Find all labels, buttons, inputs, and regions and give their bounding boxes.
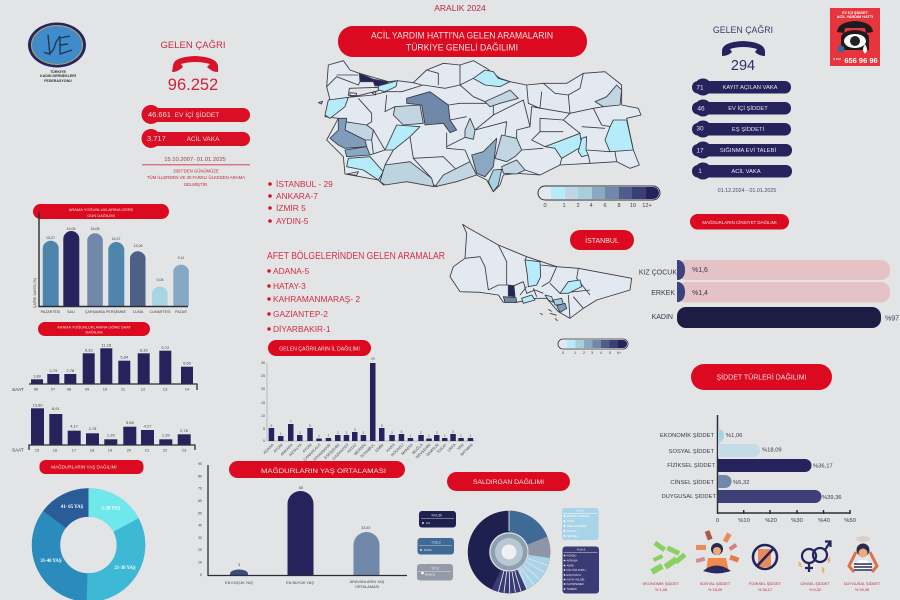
- bar chart: calls per city: 5: [263, 427, 265, 431]
- city chart pill: GELEN ÇAĞRILARIN İL DAĞILIMI: [279, 346, 360, 352]
- bar chart: hours 15-23: 21: [145, 448, 150, 452]
- violence icon captions: % 39,36: [855, 587, 869, 592]
- istanbul legend: 3: [591, 351, 593, 355]
- bar chart: calls per city: 1: [470, 434, 472, 438]
- pill: acil vaka: [142, 129, 250, 148]
- legend box: relatives: DAMAT: [567, 529, 577, 533]
- bar chart: average age: 0: [200, 573, 202, 577]
- bar chart: hours 15-23: 20: [127, 448, 132, 452]
- choropleth map of Istanbul: [450, 224, 632, 321]
- violence icon captions: CİNSEL ŞİDDET: [800, 581, 830, 586]
- donut chart: age groups: 5-20 YAŞ: [102, 506, 121, 512]
- bar chart: calls per weekday: PAZAR: [175, 310, 187, 314]
- date range and note: GELMİŞTİR.: [184, 182, 208, 187]
- age distribution pill: [40, 460, 144, 474]
- bar chart: hours 15-23: 18: [90, 448, 95, 452]
- bar chart: violence types: EKONOMİK ŞİDDET: [660, 432, 714, 439]
- map legend: [538, 186, 660, 209]
- bar chart: hours 06-14: 2,78: [66, 368, 75, 373]
- bar chart: hours 06-14: 9,72: [161, 345, 170, 350]
- legend box: others: KAYIN VALİDE: [566, 576, 585, 582]
- bar chart: average age: 80: [198, 474, 202, 478]
- violence types pill: [691, 364, 832, 390]
- bar chart: average age: [198, 462, 407, 589]
- bar chart: hours 06-14: 09: [85, 386, 90, 392]
- map legend: 8: [617, 203, 621, 209]
- bar chart: calls per city: VAN: [457, 443, 465, 451]
- bar chart: hours 06-14: 08: [67, 386, 72, 392]
- gender bars: %1,4: [692, 290, 708, 297]
- bar chart: average age: 40: [198, 524, 202, 528]
- list: disaster region cities: HATAY-3: [273, 281, 306, 291]
- pill list: case statistics: 71: [696, 84, 704, 92]
- bar chart: hours 15-23: 19: [108, 448, 113, 452]
- icon: navy telephone: [722, 41, 765, 56]
- call count number: 294: [731, 58, 755, 74]
- pill: acil vaka: 3.717: [147, 134, 166, 143]
- date range right: 01.12.2024 - 01.01.2025: [718, 188, 776, 194]
- bar chart: average age: EN KÜÇÜK YAŞ: [225, 581, 253, 585]
- pill list: case statistics: 46: [697, 106, 705, 112]
- bar chart: calls per city: 5: [271, 424, 273, 428]
- bar chart: calls per city: HATAY: [347, 443, 358, 454]
- bar chart: hours 06-14: SAAT: [12, 387, 24, 392]
- bar chart: calls per city: 2: [420, 431, 422, 435]
- violence icon captions: % 18,09: [708, 587, 722, 592]
- bar chart: calls per weekday: PAZARTESİ: [41, 309, 60, 314]
- bar chart: calls per city: 2: [363, 431, 365, 435]
- gender heading pill: MAĞDURLARIN CİNSİYET DAĞILIMI: [702, 220, 777, 225]
- violence types pill: ŞİDDET TÜRLERİ DAĞILIMI: [717, 372, 807, 382]
- bar chart: calls per city: 5: [309, 424, 311, 428]
- bar chart: calls per weekday: 18,08: [90, 227, 100, 231]
- map legend: 12+: [642, 203, 652, 209]
- bar chart: hours 15-23: 1,39: [107, 432, 115, 438]
- bar chart: calls per city: 2: [346, 431, 348, 435]
- map legend: 1: [562, 203, 566, 209]
- gender bars: %1,6: [692, 267, 708, 274]
- legend box: others: TANIDIK: [566, 587, 577, 591]
- date range and note: TÜM İLLERDEN VE 30 FARKLI ÜLKEDEN ARAMA: [147, 175, 245, 180]
- bar chart: hours 15-23: 2,78: [180, 428, 189, 433]
- violence icon captions: % 36,17: [758, 587, 772, 592]
- legend box: boyfriend: %18,3: [431, 540, 441, 544]
- legend box: others: %16,6: [577, 548, 586, 552]
- istanbul legend: 4: [600, 351, 602, 355]
- violence icon captions: SOSYAL ŞİDDET: [700, 581, 731, 586]
- legend box: stranger: EŞ: [426, 521, 430, 525]
- date range and note: 15.10.2007- 01.01.2025: [164, 157, 226, 163]
- bar chart: hours 15-23: 22: [163, 448, 168, 452]
- list: top cities: [268, 179, 333, 226]
- bar chart: hours 15-23: 1,39: [162, 432, 170, 438]
- legend box: others: [562, 546, 599, 594]
- pill list: case statistics: KAYIT AÇILAN VAKA: [722, 85, 778, 91]
- pill list: case statistics: 1: [698, 168, 702, 175]
- attacker distribution pill: SALDIRGAN DAĞILIMI: [473, 477, 544, 486]
- map legend: 2: [576, 203, 580, 209]
- bar chart: calls per city: URFA: [447, 443, 457, 453]
- bar chart: calls per weekday: SALI: [67, 310, 75, 314]
- bar chart: calls per city: ÇANAKKALE: [303, 443, 322, 462]
- legend box: ex: %7,8: [431, 566, 439, 570]
- bar chart: hours 15-23: 23: [182, 448, 187, 452]
- list: top cities: İSTANBUL - 29: [276, 179, 333, 189]
- violence icon captions: EKONOMİK ŞİDDET: [643, 581, 680, 586]
- bar chart: calls per weekday: PERŞEMBE: [106, 310, 127, 314]
- bar chart: calls per city: İZMİR: [374, 442, 385, 453]
- bar chart: calls per city: 3: [452, 430, 454, 434]
- bar chart: calls per city: 3: [401, 430, 403, 434]
- legend box: relatives: OĞUL: [567, 518, 575, 523]
- bar chart: hours 15-23: 5,56: [126, 420, 134, 425]
- bar chart: calls per city: BATMAN: [460, 443, 474, 457]
- pill list: case statistics: 17: [696, 148, 704, 154]
- bar chart: calls per weekday: 13,06: [134, 244, 142, 248]
- pill: acil vaka: ACİL VAKA: [187, 134, 220, 143]
- bar chart: calls per city: 1: [318, 434, 320, 438]
- total calls number: 96.252: [168, 76, 218, 94]
- bar chart: hours 06-14: 10: [103, 386, 108, 392]
- map legend: 0: [543, 203, 547, 209]
- bar chart: calls per city: MUĞLA: [411, 442, 424, 455]
- bar chart: calls per city: ANTALYA: [288, 443, 303, 457]
- bar chart: calls per city: 20: [261, 387, 265, 391]
- hourly chart pill: ARAMA YOĞUNLUKLARINA GÖRE SAAT: [57, 324, 132, 330]
- bar chart: calls per city: 1: [460, 434, 462, 438]
- bar chart: calls per city: 10: [261, 414, 265, 418]
- bar chart: hours 15-23: 8,91: [52, 406, 60, 411]
- bar chart: hours 06-14: 1,89: [33, 374, 42, 378]
- map legend: 4: [589, 203, 593, 209]
- heading: disaster regions: AFET BÖLGELERİNDEN GELEN ARAMALAR: [267, 249, 445, 262]
- pill list: case statistics: SIĞINMA EVİ TALEBİ: [720, 147, 776, 154]
- bar chart: calls per city: 1: [428, 434, 430, 438]
- bar chart: calls per city: DİYARBAKIR: [312, 442, 332, 462]
- legend box: others: KAYINPEDER: [566, 582, 584, 586]
- attacker distribution pill: [447, 472, 570, 491]
- icon: social violence woman: [696, 530, 739, 574]
- bar chart: violence types: %50: [844, 518, 856, 524]
- gender bars: KIZ ÇOCUK: [639, 270, 677, 276]
- legend box: others: ESKİ KOCA: [566, 572, 581, 577]
- bar chart: calls per city: ADANA: [263, 443, 275, 455]
- legend box: others: KÜLTÜR KURU: [566, 568, 585, 572]
- bar chart: average age: 60: [198, 499, 202, 503]
- bar chart: hours 06-14: 11: [121, 386, 126, 392]
- age distribution pill: MAĞDURLARIN YAŞ DAĞILIMI: [51, 464, 117, 470]
- icon: economic violence money: [650, 541, 687, 575]
- donut chart: age groups: [40, 502, 136, 588]
- istanbul legend: 6+: [617, 351, 622, 355]
- hotline poster: [830, 8, 880, 66]
- istanbul legend: [558, 339, 628, 355]
- bar chart: average age: ARAYANLARIN YAŞ: [350, 580, 385, 584]
- bar chart: calls per weekday: CUMA: [133, 310, 144, 314]
- date range and note: [142, 157, 250, 187]
- pill: ev içi şiddet: 46.661: [148, 110, 171, 119]
- gender bars: KADIN: [652, 314, 673, 321]
- sunburst chart: attackers: [478, 510, 548, 593]
- bar chart: violence types: %5,32: [733, 480, 749, 486]
- list: top cities: ANKARA-7: [276, 191, 318, 201]
- pill list: case statistics: EŞ ŞİDDETİ: [732, 126, 764, 133]
- bar chart: calls per city: GAZİANTEP: [331, 442, 350, 461]
- istanbul legend: 2: [583, 351, 585, 355]
- bar chart: calls per city: MERSİN: [353, 442, 367, 456]
- hourly chart pill: [38, 322, 150, 336]
- logo: federation: FEDERASYONU: [44, 79, 72, 83]
- bar chart: hours 15-23: 4,17: [70, 424, 79, 428]
- legend box: stranger: [419, 511, 456, 528]
- bar chart: calls per city: 5: [381, 424, 383, 428]
- bar chart: hours 15-23: [12, 402, 195, 452]
- list: top cities: AYDIN-5: [276, 216, 309, 226]
- pill: ev içi şiddet: [142, 105, 250, 124]
- bar chart: average age: 3: [238, 563, 240, 567]
- icon: red telephone: [172, 56, 218, 72]
- bar chart: average age: 50: [198, 512, 202, 516]
- bar chart: hours 06-14: 5,56: [183, 361, 192, 366]
- date range and note: 2007'DEN GÜNÜMÜZE: [173, 168, 219, 174]
- bar chart: hours 06-14: 11,18: [101, 342, 112, 348]
- hourly chart pill: DAĞILIMI: [85, 330, 103, 334]
- logo: federation: TÜRKİYE: [50, 69, 66, 74]
- bar chart: calls per city: 25: [261, 374, 265, 378]
- bar chart: calls per weekday: CUMARTESİ: [149, 309, 171, 314]
- bar chart: calls per city: 1: [410, 434, 412, 438]
- bar chart: violence types: %18,09: [762, 448, 782, 454]
- istanbul legend: 5: [609, 351, 611, 355]
- bar chart: calls per weekday: ÇARŞAMBA: [85, 310, 106, 314]
- bar chart: calls per city: 1: [328, 434, 330, 438]
- bar chart: calls per weekday: 9,11: [178, 256, 184, 260]
- bar chart: calls per city: 30: [261, 361, 265, 365]
- bar chart: calls per weekday: 16,07: [112, 237, 120, 241]
- bar chart: violence types: %10: [738, 518, 750, 524]
- istanbul legend: 0: [562, 351, 564, 355]
- donut chart: age groups: 41- 65 YAŞ: [61, 505, 84, 510]
- bar chart: calls per weekday: 19,06: [66, 227, 76, 231]
- bar chart: average age: 33,87: [361, 526, 371, 530]
- bar chart: hours 06-14: 2,79: [49, 368, 58, 373]
- violence icon captions: FİZİKSEL ŞİDDET: [749, 581, 782, 586]
- legend box: stranger: %41,66: [431, 514, 442, 518]
- list: disaster region cities: KAHRAMANMARAŞ- 2: [273, 294, 360, 304]
- heading: gelen çağrı red: GELEN ÇAĞRI: [161, 40, 225, 51]
- violence icon captions: % 1,06: [655, 587, 667, 592]
- bar chart: violence types: DUYGUSAL ŞİDDET: [661, 493, 716, 500]
- bar chart: calls per weekday: [32, 212, 189, 314]
- weekly chart pill: ARAMA YOĞUNLUKLARINA GÖRE: [69, 207, 134, 212]
- bar chart: calls per city: MANİSA: [400, 442, 414, 456]
- gender bars: %97: [885, 316, 899, 322]
- bar chart: violence types: %40: [818, 518, 830, 524]
- pill list: case statistics: EV İÇİ ŞİDDET: [728, 105, 768, 112]
- bar chart: hours 15-23: 13,90: [32, 402, 43, 408]
- list: top cities: İZMİR 5: [276, 203, 306, 213]
- bar chart: calls per city: 29: [371, 357, 375, 361]
- bar chart: violence types: %36,17: [813, 464, 833, 470]
- bar chart: hours 06-14: 8,33: [140, 348, 148, 352]
- list: disaster region cities: ADANA-5: [273, 266, 310, 276]
- bar chart: calls per city: 0: [263, 439, 265, 443]
- bar chart: average age: 70: [198, 486, 202, 490]
- icon: sexual violence gender symbols: [798, 542, 830, 573]
- bar chart: calls per city: [261, 357, 475, 462]
- bar chart: calls per city: AYDIN: [273, 443, 284, 454]
- bar chart: violence types: %30: [791, 518, 803, 524]
- bar chart: average age: 20: [198, 548, 202, 552]
- weekly chart pill: GÜN DAĞILIMI: [87, 213, 115, 218]
- legend box: others: ANNE: [566, 564, 574, 568]
- bar chart: hours 15-23: 17: [72, 448, 77, 452]
- legend box: boyfriend: BABA: [424, 548, 432, 552]
- bar chart: calls per city: İSTANBUL: [359, 442, 376, 459]
- bar chart: hours 06-14: 07: [51, 386, 56, 392]
- bar chart: calls per weekday: 3,06: [156, 278, 164, 282]
- bar chart: calls per weekday: ÇAĞRI SAYISI (%): [32, 278, 37, 308]
- gender bars: ERKEK: [651, 290, 675, 297]
- bar chart: hours 15-23: 2,78: [89, 426, 97, 431]
- legend box: others: AKRABA: [566, 558, 578, 562]
- gender heading pill: [690, 214, 789, 230]
- title pill: ACİL YARDIM HATTI'NA GELEN ARAMALARIN: [371, 30, 553, 40]
- bar chart: calls per city: NEVŞEHİR: [414, 442, 432, 459]
- istanbul label pill: İSTANBUL: [585, 236, 619, 245]
- hotline poster: 656 96 96: [844, 56, 878, 65]
- bar chart: hours 06-14: [12, 342, 197, 392]
- hotline poster: ACİL YARDIM HATTI: [837, 15, 873, 19]
- hotline poster: 0 212: [833, 57, 841, 61]
- istanbul label pill: [570, 230, 634, 250]
- map legend: 6: [603, 203, 607, 209]
- legend box: ex: [417, 564, 453, 580]
- weekly chart pill: [33, 204, 169, 219]
- legend box: relatives: %15,7: [576, 508, 585, 512]
- pill list: case statistics: ACİL VAKA: [731, 168, 761, 175]
- bar chart: calls per city: ANKARA: [280, 443, 294, 457]
- bar chart: hours 06-14: 8,33: [85, 348, 93, 352]
- heading: gelen çağrı navy: GELEN ÇAĞRI: [713, 25, 773, 35]
- violence icon captions: DUYGUSAL ŞİDDET: [844, 581, 881, 586]
- pill: ev içi şiddet: EV İÇİ ŞİDDET: [175, 110, 219, 119]
- bar chart: calls per city: AYDIN: [302, 443, 313, 454]
- bar chart: calls per city: KARS: [386, 443, 396, 453]
- bar chart: hours 15-23: 16: [53, 448, 58, 452]
- legend box: relatives: ERKEK KARDEŞ: [567, 514, 589, 518]
- bar chart: average age: 65: [299, 486, 303, 490]
- logo: federation: KADIN DERNEKLERİ: [40, 74, 76, 78]
- bar chart: violence types: %20: [765, 518, 777, 524]
- bar chart: calls per city: ESKİŞEHİR: [323, 442, 341, 460]
- bar chart: calls per city: 7: [290, 420, 292, 424]
- list: disaster region cities: DİYARBAKIR-1: [273, 324, 331, 334]
- violence icon captions: [643, 581, 881, 592]
- pill list: case statistics: 30: [696, 126, 704, 132]
- age average pill: MAĞDURLARIN YAŞ ORTALAMASI: [261, 468, 386, 475]
- bar chart: violence types: FİZİKSEL ŞİDDET: [667, 462, 715, 469]
- istanbul legend: 1: [574, 351, 576, 355]
- logo: federation: [28, 22, 86, 83]
- bar chart: calls per city: 1: [280, 432, 282, 436]
- city chart pill: [268, 340, 371, 356]
- bar chart: violence types: %39,36: [822, 495, 842, 501]
- bar chart: violence types: [660, 415, 856, 524]
- bar chart: calls per city: 1: [444, 434, 446, 438]
- list: disaster region cities: GAZİANTEP-2: [273, 309, 328, 319]
- bar chart: average age: 10: [198, 560, 202, 564]
- gender bars: [639, 260, 899, 328]
- legend box: others: KOMŞU: [566, 554, 576, 558]
- title pill: TÜRKİYE GENELİ DAĞILIMI: [406, 42, 518, 52]
- bar chart: hours 15-23: SAAT: [12, 448, 24, 452]
- list: disaster region cities: [267, 266, 360, 334]
- bar chart: calls per city: SAMSUN: [425, 443, 440, 457]
- legend box: relatives: ABLA KARDEŞ: [567, 524, 586, 528]
- bar chart: calls per city: 3: [354, 428, 356, 432]
- bar chart: calls per weekday: 15,07: [46, 236, 55, 240]
- legend box: ex: BABAŞ: [425, 572, 435, 576]
- icon: emotional violence woman: [849, 536, 877, 572]
- bar chart: hours 06-14: 12: [141, 386, 146, 392]
- bar chart: calls per city: 2: [391, 431, 393, 435]
- choropleth map of Turkey: [318, 61, 641, 192]
- hotline poster: EV İÇİ ŞİDDET: [842, 11, 869, 15]
- donut chart: age groups: 21-30 YAŞ: [114, 566, 136, 571]
- bar chart: calls per city: KOCAELİ: [390, 442, 405, 457]
- bar chart: average age: EN BÜYÜK YAŞ: [286, 581, 314, 585]
- bar chart: average age: ORTALAMASI: [355, 585, 379, 589]
- bar chart: average age: 30: [198, 536, 202, 540]
- title pill: [338, 26, 587, 57]
- bar chart: hours 15-23: 4,17: [144, 424, 152, 428]
- bar chart: hours 06-14: 06: [34, 386, 39, 392]
- bar chart: violence types: CİNSEL ŞİDDET: [670, 479, 714, 486]
- bar chart: calls per city: 2: [436, 431, 438, 435]
- bar chart: calls per city: 2: [299, 431, 301, 435]
- bar chart: hours 15-23: 15: [35, 448, 40, 452]
- bar chart: violence types: SOSYAL ŞİDDET: [669, 448, 714, 455]
- age average pill: [229, 461, 405, 478]
- pill list: case statistics: [692, 78, 792, 180]
- violence icon captions: % 5,32: [809, 587, 821, 592]
- icon: physical violence forbidden fist: [753, 545, 777, 569]
- legend box: relatives: SEVGİLİ: [567, 533, 578, 538]
- donut chart: age groups: 31-40 YAŞ: [40, 559, 62, 564]
- bar chart: hours 06-14: 5,84: [120, 355, 129, 360]
- bar chart: calls per city: 15: [261, 401, 265, 405]
- bar chart: violence types: %1,06: [726, 433, 742, 439]
- legend box: relatives: [562, 508, 598, 540]
- bar chart: hours 06-14: 13: [163, 386, 168, 392]
- bar chart: calls per city: 2: [337, 431, 339, 435]
- date heading: ARALIK 2024: [434, 3, 486, 13]
- legend box: boyfriend: [418, 538, 454, 554]
- bar chart: calls per city: TOKAT: [436, 442, 448, 454]
- map legend: 10: [630, 203, 636, 209]
- bar chart: hours 06-14: 14: [185, 386, 190, 392]
- bar chart: violence types: 0: [716, 518, 719, 524]
- bar chart: average age: 90: [198, 462, 202, 466]
